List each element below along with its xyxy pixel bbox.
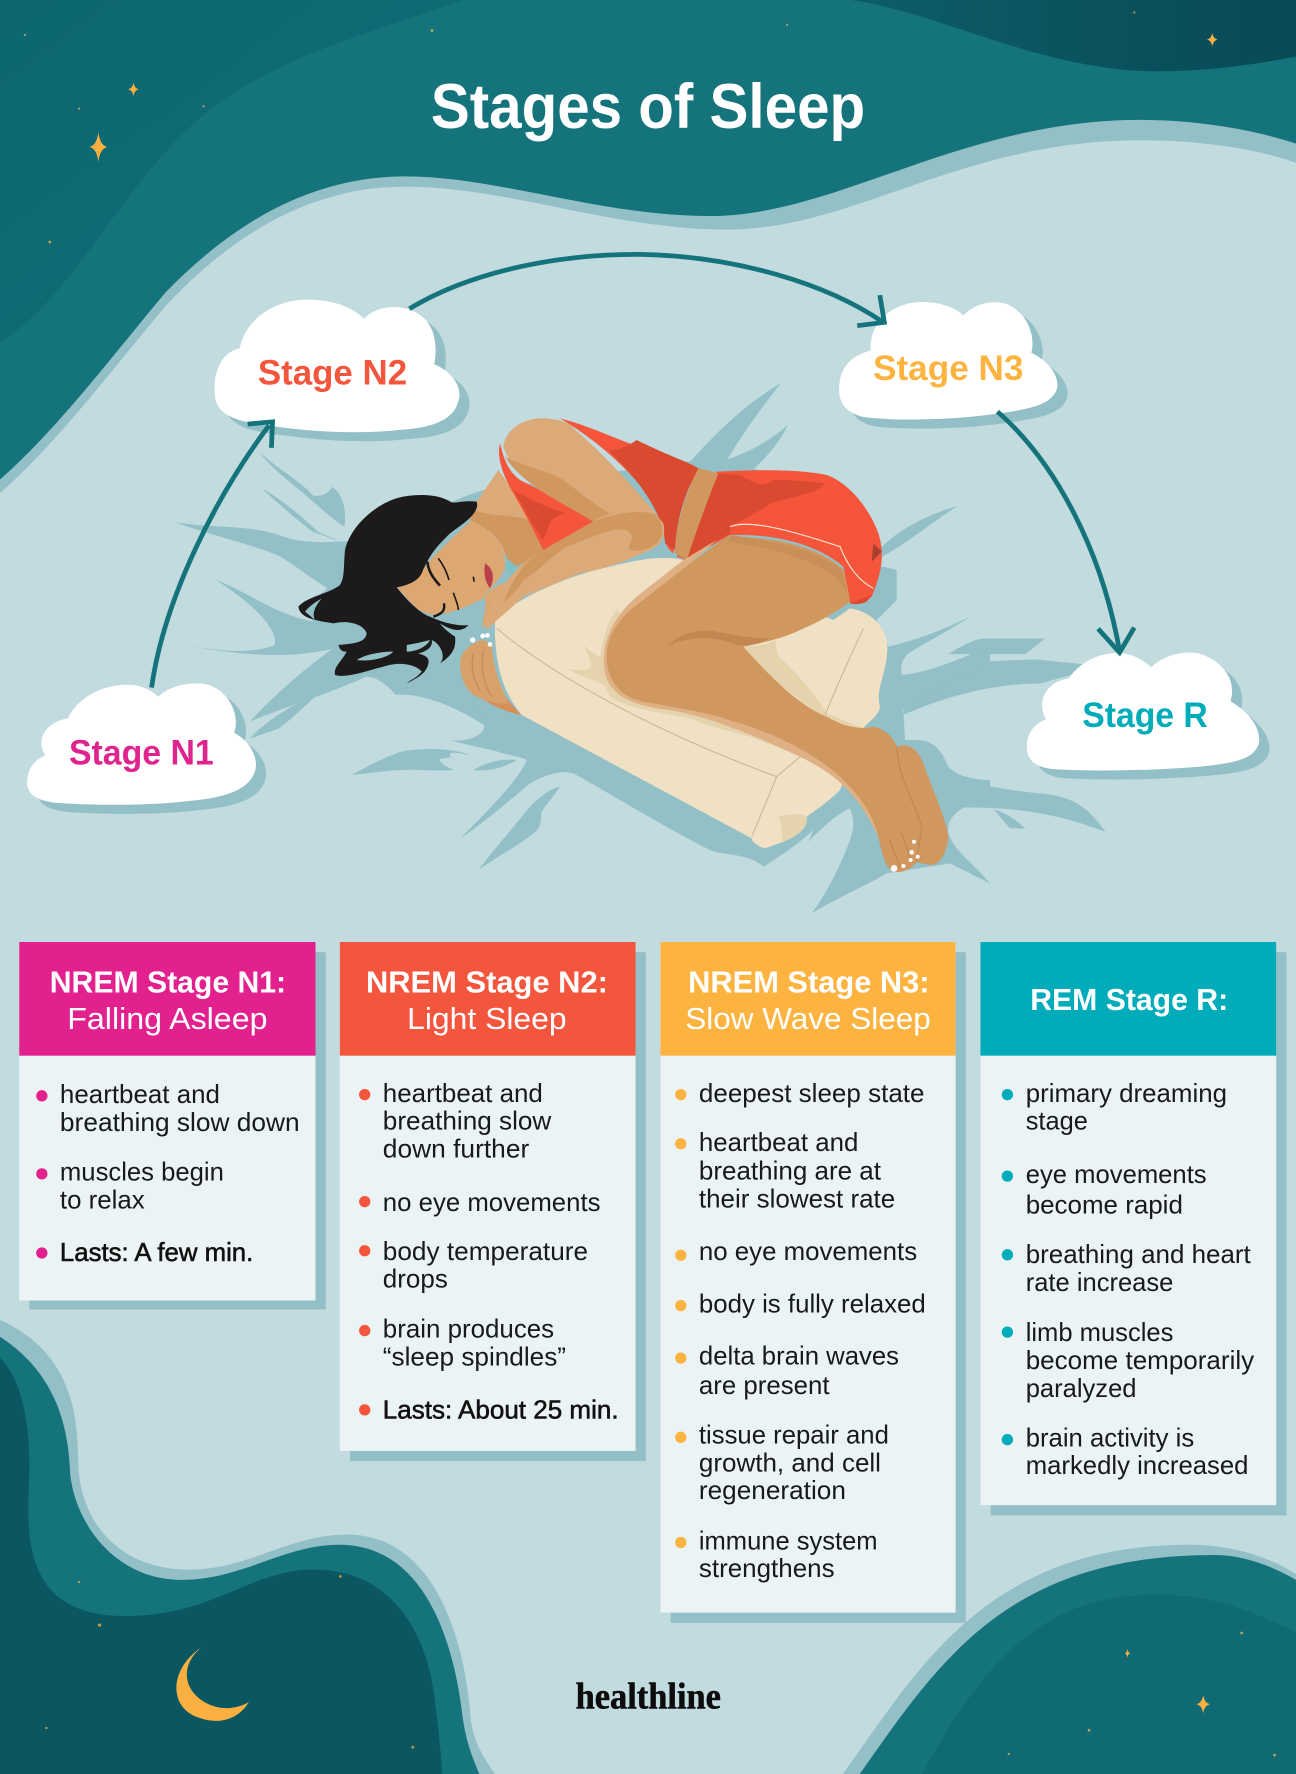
bullet: eye movements: no eye movements	[699, 1238, 917, 1266]
toenails	[891, 840, 920, 872]
illustration: sleeping woman on wrinkled sheets	[175, 383, 1105, 913]
bullet: muscles	[36, 1159, 224, 1214]
header: N2	[340, 942, 636, 1056]
hair gaps	[305, 598, 430, 660]
bullet: eye movements	[1002, 1161, 1207, 1219]
bullet: breathing	[1002, 1241, 1251, 1297]
leg lighter edge	[604, 540, 890, 860]
cloud: Stage N3	[839, 302, 1068, 429]
cloud: Stage R: Stage R	[1082, 696, 1208, 735]
bullet: tissue repair: growth, and cell	[699, 1449, 881, 1477]
bullet: eye movements: no eye movements	[383, 1189, 601, 1217]
bullet: eye movements: eye movements	[1026, 1161, 1207, 1189]
panel: NREM Stage N3	[660, 942, 966, 1623]
leg and foot	[604, 537, 948, 872]
bullet: breathing: rate increase	[1026, 1269, 1173, 1297]
torso and arm	[486, 418, 882, 630]
header: N3: Slow Wave Sleep	[685, 1002, 931, 1036]
cloud: Stage R	[1027, 652, 1269, 780]
moon	[176, 1648, 249, 1721]
title: Stages of Sleep	[431, 72, 865, 142]
header: N2: NREM Stage N2:	[366, 965, 608, 999]
header: N2: Light Sleep	[407, 1002, 567, 1036]
bullet: heartbeat and breathing: breathing slow down	[60, 1109, 300, 1137]
red top	[560, 418, 700, 553]
bullet: tissue repair	[675, 1422, 889, 1505]
sheet wrinkles	[175, 383, 1105, 913]
thigh shade under shorts	[728, 535, 850, 602]
stars: bottom left	[45, 1575, 414, 1749]
bullet: eye movements: become rapid	[1026, 1191, 1183, 1219]
bottom right night sky	[843, 1545, 1296, 1774]
bullet: limb muscles: become temporarily	[1026, 1347, 1254, 1375]
bottom left night sky	[0, 1320, 495, 1774]
bullet: sleep spindles: “sleep spindles”	[383, 1344, 566, 1372]
header: R: REM Stage R:	[1030, 983, 1228, 1017]
arrow: N1 to N2	[152, 422, 273, 688]
bullet: sleep spindles	[359, 1316, 566, 1372]
bullet: delta waves: are present	[699, 1372, 830, 1400]
arrow: N3 to R	[997, 412, 1134, 653]
bullet: heartbeat: breathing slow	[383, 1108, 552, 1136]
bullet: delta waves: delta brain waves	[699, 1343, 899, 1371]
cloud: Stage N1	[27, 683, 266, 814]
lips	[484, 563, 493, 588]
bullet: heartbeat: down further	[383, 1135, 530, 1163]
stars: top	[24, 11, 1218, 243]
bullet: limb muscles: paralyzed	[1026, 1375, 1137, 1403]
bullet: muscles: muscles begin	[60, 1159, 224, 1187]
bullet: heartbeat: their slowest rate	[699, 1185, 895, 1213]
header: N3	[660, 942, 956, 1056]
bullet: dreaming	[1002, 1080, 1227, 1136]
header: N1: Falling Asleep	[67, 1002, 267, 1036]
bullet: heartbeat	[675, 1129, 895, 1213]
hand at chin	[483, 567, 537, 628]
stars: bottom right	[1008, 1632, 1276, 1756]
header: R	[980, 942, 1276, 1056]
panel: NREM Stage N1	[19, 942, 326, 1310]
bullet: tissue repair: regeneration	[699, 1477, 846, 1505]
bullet: temperature	[359, 1238, 588, 1294]
bullet: dreaming: stage	[1026, 1108, 1088, 1136]
top night sky	[0, 0, 1296, 493]
pillow	[495, 558, 887, 848]
head and hair	[298, 470, 550, 683]
bullet: heartbeat and breathing: heartbeat and	[60, 1081, 220, 1109]
face	[397, 520, 505, 615]
bullet: tissue repair: tissue repair and	[699, 1422, 889, 1450]
bullet: muscles: to relax	[60, 1186, 145, 1214]
cloud: Stage N2	[215, 300, 470, 441]
bullet: immune system	[675, 1528, 878, 1583]
fingernails	[470, 633, 492, 647]
panel: REM Stage R	[980, 942, 1286, 1515]
bullet: sleep spindles: brain produces	[383, 1316, 554, 1344]
bullet: heartbeat and breathing	[36, 1081, 300, 1137]
bullet: temperature: body temperature	[383, 1238, 588, 1266]
cloud: Stage N1: Stage N1	[69, 733, 214, 772]
bullet: heartbeat: breathing are at	[699, 1158, 881, 1186]
bullet: limb muscles	[1002, 1319, 1254, 1403]
header: N1: NREM Stage N1:	[50, 965, 286, 999]
teal gap under chin	[505, 558, 517, 577]
arm	[486, 418, 664, 630]
shorts	[677, 470, 882, 604]
bullet: temperature: drops	[383, 1266, 448, 1294]
header: N1	[19, 942, 316, 1056]
bullet: heartbeat	[359, 1080, 552, 1163]
bullet: delta waves	[675, 1343, 899, 1400]
arrow: N2 to N3	[409, 254, 884, 326]
bullet: dreaming: primary dreaming	[1026, 1080, 1227, 1108]
bullet: immune system: strengthens	[699, 1555, 835, 1583]
bullet: deepest: deepest sleep state	[699, 1080, 924, 1108]
bullet: relaxed: body is fully relaxed	[699, 1291, 926, 1319]
cloud: Stage N2: Stage N2	[258, 353, 407, 392]
bullet: brain activity	[1002, 1424, 1248, 1480]
bullet: heartbeat: heartbeat and	[383, 1080, 543, 1108]
panel: NREM Stage N2	[340, 942, 646, 1461]
bullet: duration: Lasts: About 25 min.	[383, 1396, 619, 1424]
bullet: immune system: immune system	[699, 1528, 878, 1556]
knee crease	[667, 631, 770, 647]
closed eyes	[427, 558, 474, 617]
neck and chest	[470, 470, 550, 567]
bullet: duration: Lasts: A few min.	[60, 1239, 253, 1267]
waist skin band	[675, 468, 718, 560]
cloud: Stage N3: Stage N3	[873, 349, 1023, 388]
bullet: heartbeat: heartbeat and	[699, 1129, 858, 1157]
header: N3: NREM Stage N3:	[688, 965, 930, 999]
hair	[298, 495, 477, 683]
hand under pillow	[460, 633, 522, 715]
logo: healthline: healthline	[576, 1677, 721, 1718]
bullet: limb muscles: limb muscles	[1026, 1319, 1173, 1347]
bullet: breathing: breathing and heart	[1026, 1241, 1251, 1269]
bullet: brain activity: markedly increased	[1026, 1452, 1248, 1480]
bullet: brain activity: brain activity is	[1026, 1424, 1194, 1452]
